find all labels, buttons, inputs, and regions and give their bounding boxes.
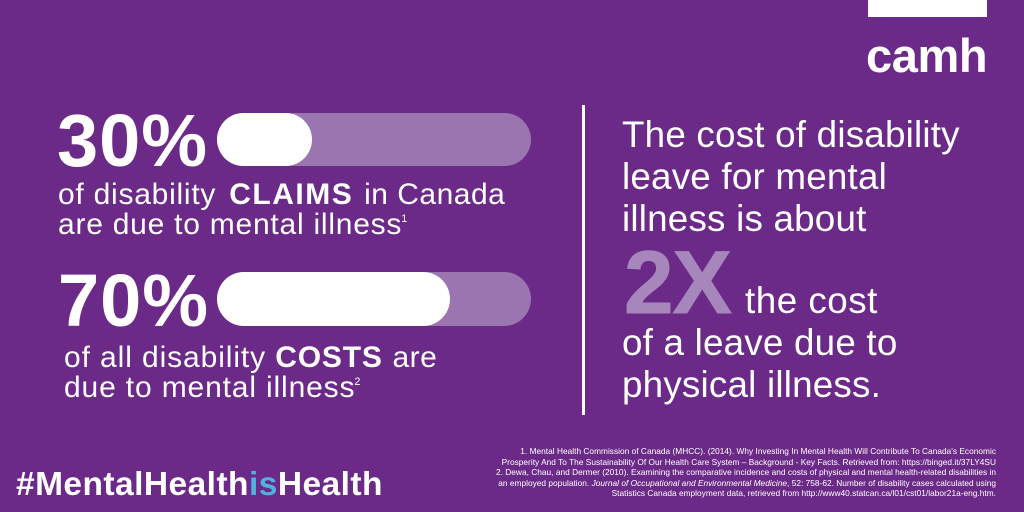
references xyxy=(496,446,996,498)
bar: 70 percent xyxy=(217,272,531,326)
text: cost of disability leave: leave for mental xyxy=(622,156,887,197)
text: of a leave: of a leave due to xyxy=(622,322,898,363)
text: cost of disability leave: illness is about xyxy=(622,198,867,239)
hashtag: #MentalHealthisHealth xyxy=(16,466,383,503)
text: claims: of disability CLAIMS in Canada xyxy=(58,178,505,211)
references: 1. Mental Health Commission of Canada (MHCC). (2014). Why Investing In Mental Health Will Contribute To Canada's Economic xyxy=(520,446,996,456)
references: an employed population. Journal of Occupational and Environmental Medicine, 52: 758-62. Number of disability cases calculated using xyxy=(498,478,996,488)
big 2X: 2X xyxy=(624,232,731,332)
text: cost of disability leave xyxy=(622,114,960,239)
text: of a leave: physical illness. xyxy=(622,364,881,405)
stat 30 percent: 30% xyxy=(57,99,208,182)
text: claims: are due to mental illness1 xyxy=(58,208,407,241)
text: of a leave xyxy=(622,322,898,405)
stat 70 percent: 70% xyxy=(58,259,209,342)
text: costs xyxy=(64,341,437,404)
text: cost of disability leave: The cost of disability xyxy=(622,114,960,155)
text: claims xyxy=(58,178,505,241)
text: costs: due to mental illness2 xyxy=(64,371,360,404)
references: Statistics Canada employment data, retrieved from http://www40.statcan.ca/l01/cst01/labor21a-eng.htm. xyxy=(612,488,996,498)
logo: camh xyxy=(866,0,987,82)
text: the cost: the cost xyxy=(745,280,878,321)
logo: camh: camh xyxy=(866,29,987,82)
references: 2. Dewa, Chau, and Dermer (2010). Examining the comparative incidence and costs of physical and mental health-related disabilities in xyxy=(496,467,996,477)
divider xyxy=(582,105,585,415)
text: costs: of all disability COSTS are xyxy=(64,341,437,374)
bar: 30 percent xyxy=(217,113,531,166)
references: Prosperity And To The Sustainability Of Our Health Care System – Background - Key Facts. Retrieved from: https://binged.it/37LY4SU xyxy=(502,457,996,467)
